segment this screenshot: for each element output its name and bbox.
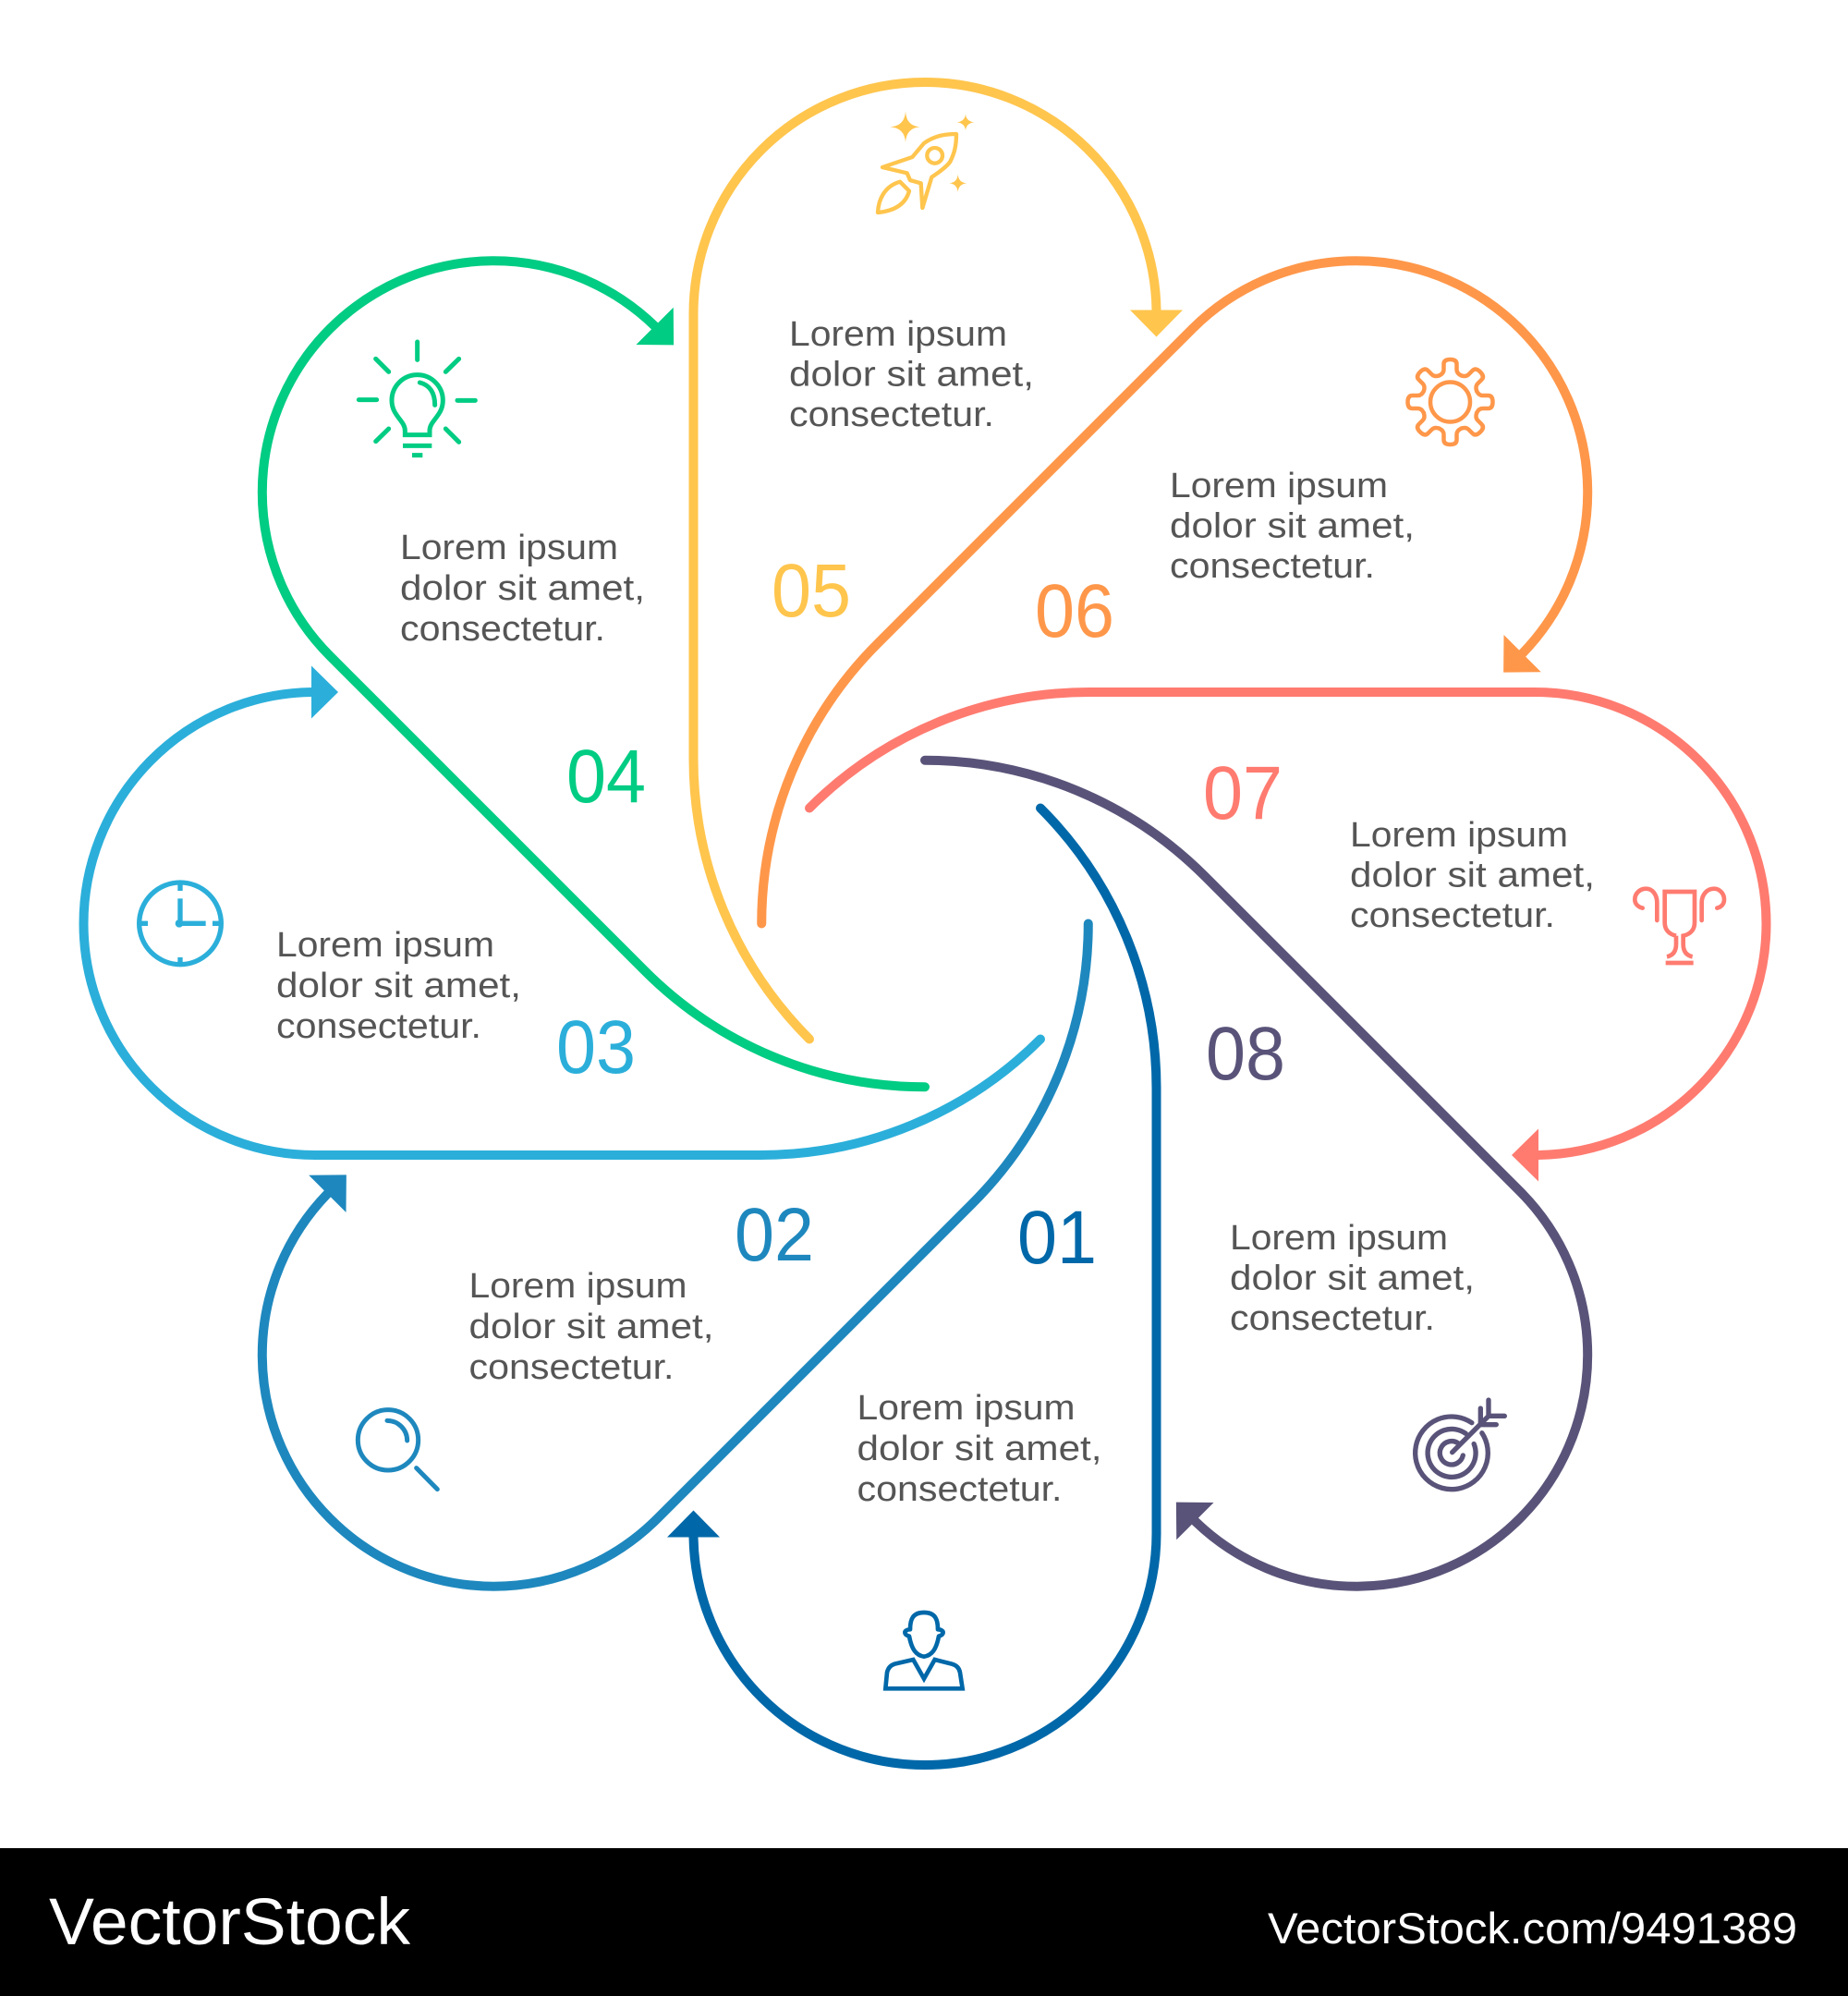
petal outline with arrow 08 xyxy=(661,678,1684,1701)
text block 07: dolor sit amet, xyxy=(1350,856,1595,895)
petal outline with arrow 04 xyxy=(166,146,1189,1169)
text block 02: Lorem ipsum xyxy=(469,1267,687,1306)
text block 07: Lorem ipsum xyxy=(1350,816,1568,855)
panel: step 01 xyxy=(667,808,1157,1765)
text block 02: dolor sit amet, xyxy=(469,1308,713,1346)
text block 07 xyxy=(1350,816,1595,935)
watermark bar xyxy=(0,1848,1848,1996)
text block 06: consectetur. xyxy=(1170,547,1375,586)
number 07: 07 xyxy=(1203,751,1283,835)
text block 05: consectetur. xyxy=(789,396,994,434)
icon: trophy xyxy=(1635,889,1724,963)
text block 03: dolor sit amet, xyxy=(276,967,521,1005)
text block 05: Lorem ipsum xyxy=(789,315,1007,354)
text block 02 xyxy=(469,1267,713,1387)
panel: step 07 xyxy=(809,692,1767,1181)
icon: light bulb xyxy=(359,342,475,456)
panel: step 04 xyxy=(166,146,1189,1169)
text block 02: consectetur. xyxy=(469,1348,675,1387)
panel: step 05 xyxy=(693,82,1183,1039)
petal outline with arrow 05 xyxy=(693,82,1183,1039)
petal outline with arrow 03 xyxy=(83,665,1040,1155)
panel: step 08 xyxy=(661,678,1684,1701)
image reference url: VectorStock.com/9491389 xyxy=(1268,1904,1797,1953)
text block 06: dolor sit amet, xyxy=(1170,506,1415,545)
text block 07: consectetur. xyxy=(1350,896,1555,935)
icon: clock xyxy=(140,882,221,965)
number 06: 06 xyxy=(1035,569,1114,653)
number 05: 05 xyxy=(772,549,851,633)
text block 01: dolor sit amet, xyxy=(857,1430,1101,1468)
number 08: 08 xyxy=(1206,1012,1285,1096)
text block 01: consectetur. xyxy=(857,1470,1063,1509)
text block 08 xyxy=(1230,1219,1475,1338)
text block 03: Lorem ipsum xyxy=(276,926,494,965)
text block 08: Lorem ipsum xyxy=(1230,1219,1448,1258)
petal outline with arrow 06 xyxy=(679,165,1702,1187)
text block 04 xyxy=(400,529,645,649)
number 03: 03 xyxy=(556,1005,636,1089)
icon: target with arrow xyxy=(1416,1400,1504,1490)
text block 08: consectetur. xyxy=(1230,1299,1435,1338)
number 02: 02 xyxy=(735,1193,814,1277)
text block 04: Lorem ipsum xyxy=(400,529,618,567)
panel: step 06 xyxy=(679,165,1702,1187)
text block 08: dolor sit amet, xyxy=(1230,1259,1475,1297)
text block 05 xyxy=(789,315,1034,434)
panel: step 03 xyxy=(83,665,1040,1155)
text block 03: consectetur. xyxy=(276,1007,481,1046)
text block 06: Lorem ipsum xyxy=(1170,467,1388,505)
text block 04: consectetur. xyxy=(400,610,605,649)
text block 03 xyxy=(276,926,521,1046)
petal outline with arrow 01 xyxy=(667,808,1157,1765)
brand name: VectorStock xyxy=(49,1886,411,1959)
text block 01 xyxy=(857,1389,1101,1509)
petal outline with arrow 07 xyxy=(809,692,1767,1181)
icon: gear xyxy=(1408,359,1493,444)
petal outline with arrow 02 xyxy=(148,660,1171,1682)
number 01: 01 xyxy=(1017,1196,1097,1280)
text block 06 xyxy=(1170,467,1415,586)
panel: step 02 xyxy=(148,660,1171,1682)
icon: person xyxy=(885,1613,963,1688)
text block 05: dolor sit amet, xyxy=(789,355,1034,394)
icon: rocket xyxy=(878,112,975,213)
text block 04: dolor sit amet, xyxy=(400,569,645,608)
icon: magnifier xyxy=(358,1410,437,1490)
number 04: 04 xyxy=(566,735,646,819)
text block 01: Lorem ipsum xyxy=(857,1389,1076,1428)
